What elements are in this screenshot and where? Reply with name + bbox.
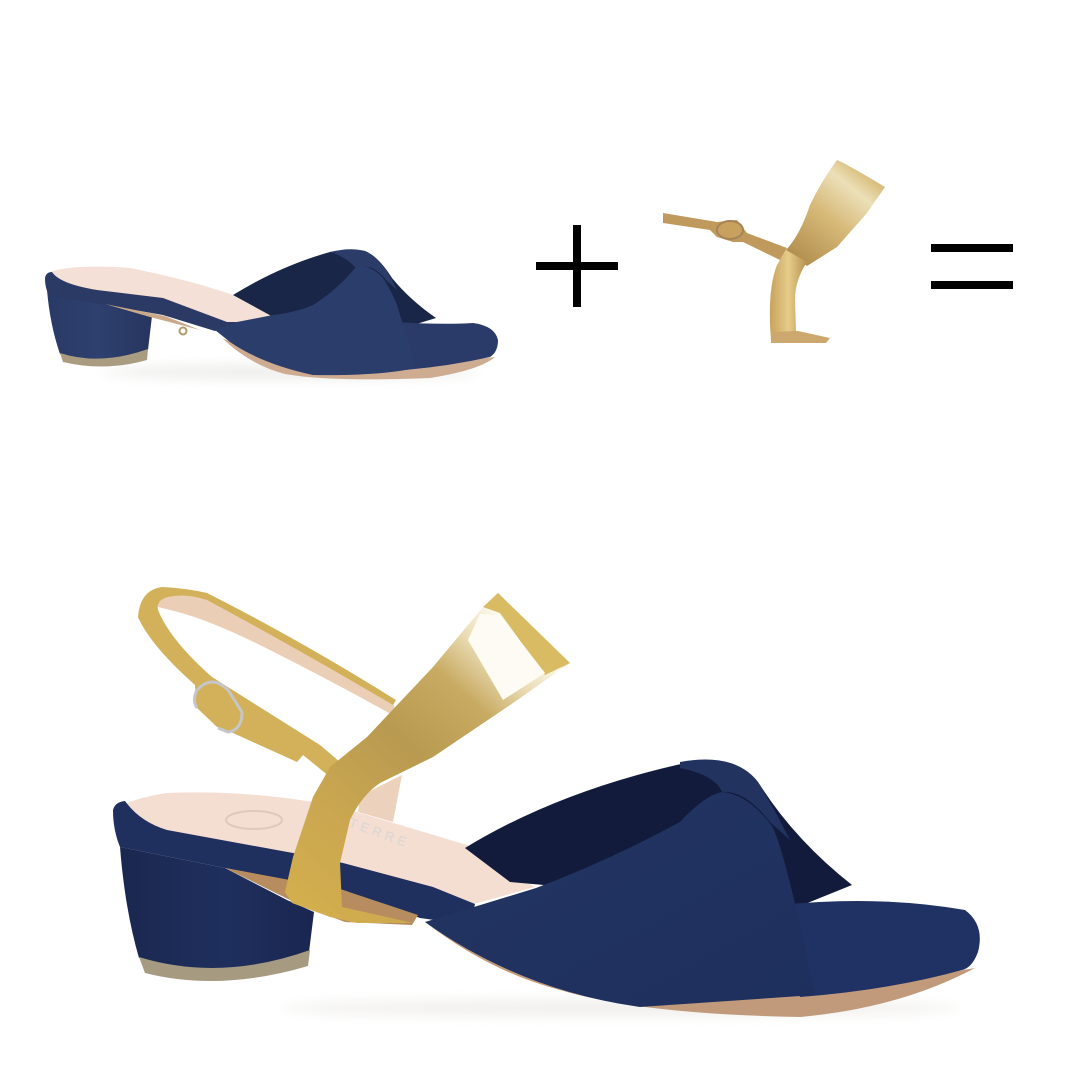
icon: large assembled sandal <box>113 587 980 1017</box>
vamp <box>425 792 815 1007</box>
small shoe toe bed <box>395 322 498 370</box>
small shoe insole <box>50 267 276 324</box>
small shoe rim <box>45 272 240 331</box>
logo on insole <box>226 811 282 829</box>
small shoe sole <box>222 338 495 379</box>
inner dark upper <box>465 761 852 906</box>
rim <box>113 801 475 925</box>
wide gold band <box>285 593 570 923</box>
icon: small denim slide shoe <box>45 249 498 379</box>
band top edge <box>483 593 570 675</box>
brand text on insole: TERRE <box>347 815 412 851</box>
small shoe heel <box>47 290 152 360</box>
sole <box>425 922 975 1017</box>
small buckle <box>717 221 743 239</box>
small shoe hook <box>180 328 186 334</box>
small foot tab <box>771 331 830 343</box>
buckle <box>194 682 242 732</box>
heel base <box>139 950 310 981</box>
small wide upper band <box>786 160 885 266</box>
icon: small gold strap <box>663 160 885 343</box>
small shoe heel base <box>60 349 148 367</box>
pink strap behind band <box>358 775 402 822</box>
band highlight <box>468 614 545 700</box>
heel block <box>120 847 314 970</box>
rolled edge <box>680 760 790 840</box>
small shoe arch <box>105 304 200 330</box>
small shoe rolled edge <box>330 249 397 290</box>
icon: equals sign <box>931 244 1013 289</box>
small lower vertical band <box>770 250 807 340</box>
insole <box>113 792 535 905</box>
sling strap lining <box>158 592 398 718</box>
small shoe inner <box>233 250 436 326</box>
icon: plus sign <box>536 225 618 307</box>
small shoe vamp <box>215 266 416 375</box>
small back strap <box>663 213 787 260</box>
sling strap gold <box>138 587 396 777</box>
arch <box>225 868 418 925</box>
toe bed <box>780 901 980 997</box>
